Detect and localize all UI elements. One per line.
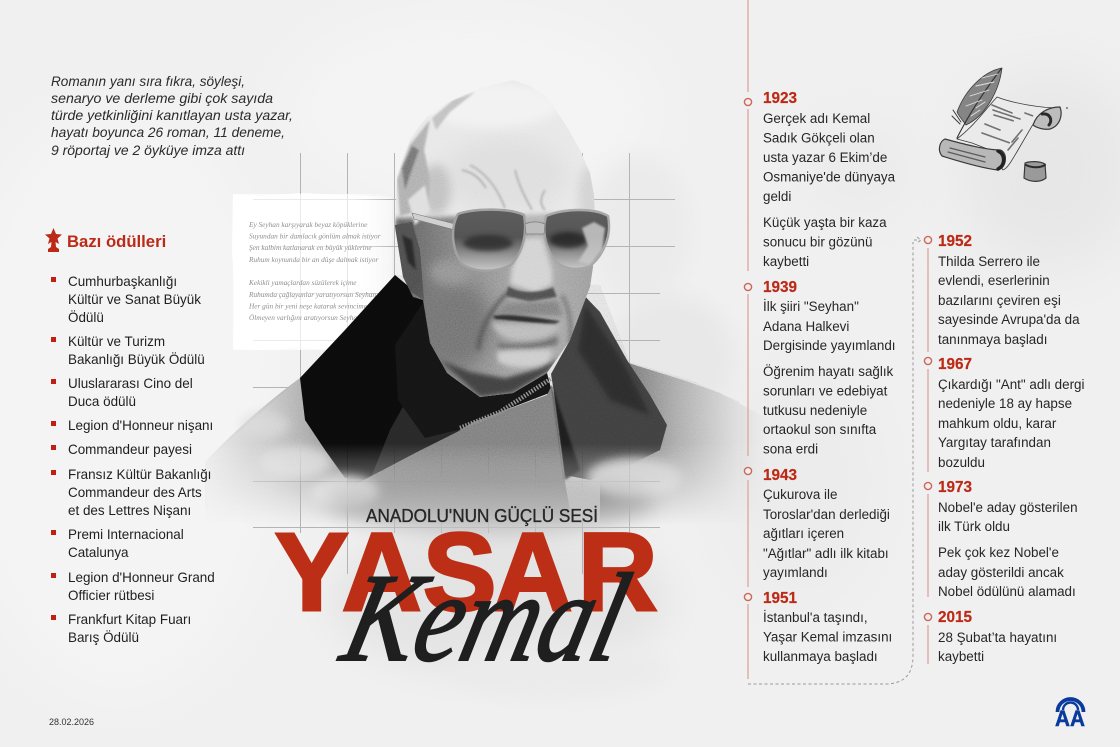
nose: [510, 238, 552, 292]
light upper head: [396, 80, 585, 225]
turtleneck: [395, 300, 552, 438]
entry 1967: Çıkardığı "Ant" adlı dergi: [938, 377, 1084, 392]
entry 2015: 2015: [938, 609, 973, 626]
entry 1943: Toroslar'dan derlediği: [763, 507, 890, 522]
entry 1943: ağıtları içeren: [763, 526, 844, 541]
entry 1943: Çukurova ile: [763, 487, 837, 502]
head: [390, 78, 605, 403]
heading: awards: [45, 228, 166, 252]
entry 1939: Dergisinde yayımlandı: [763, 338, 895, 353]
entry 1951: 1951: [763, 590, 798, 607]
subtitle: ANADOLU'NUN GÜÇLÜ SESİ: [366, 506, 598, 526]
wash behind the lower body: [325, 466, 655, 534]
lower face tone: [395, 212, 600, 400]
entry 1923: geldi: [763, 189, 791, 204]
entry 1952: tanınmaya başladı: [938, 332, 1047, 347]
left cheek: [422, 283, 494, 367]
entry 1923: 1923: [763, 90, 797, 107]
awards list: Fransız Kültür Bakanlığı: [68, 467, 211, 482]
entry 1923: Sadık Gökçeli olan: [763, 130, 875, 146]
entry 2015: kaybetti: [938, 649, 984, 664]
entry 1967: nedeniyle 18 ay hapse: [938, 396, 1072, 411]
right lens: [544, 210, 609, 269]
entry 1952: Thilda Serrero ile: [938, 254, 1040, 269]
name: Kemal: Kemal: [329, 548, 642, 688]
timeline: left column: [744, 0, 896, 679]
entry 1923: Osmaniye'de dünyaya: [763, 170, 896, 184]
entry 1923: Küçük yaşta bir kaza: [763, 215, 887, 230]
awards list: Kültür ve Turizm: [68, 334, 165, 349]
entry 1967: Yargıtay tarafından: [938, 435, 1051, 450]
intro paragraph: 9 röportaj ve 2 öyküye imza attı: [51, 142, 245, 158]
entry 1952: [924, 233, 1080, 347]
timeline connector: [748, 237, 921, 684]
awards list: Bakanlığı Büyük Ödülü: [68, 352, 205, 367]
upper lip and mouth: [496, 300, 563, 316]
poem text: Ruhum koynunda bir an düşe dalmak istiyor: [248, 255, 378, 264]
entry 1943: [744, 467, 890, 580]
entry 1973: Pek çok kez Nobel'e: [938, 545, 1059, 560]
entry 1939: Adana Halkevi: [763, 319, 849, 334]
entry 1951: İstanbul'a taşındı,: [763, 610, 868, 625]
nasolabial shadow: [478, 292, 508, 350]
intro paragraph: hayatı boyunca 26 roman, 11 deneme,: [51, 124, 285, 140]
dark left collar: [300, 275, 430, 480]
awards list: Cumhurbaşkanlığı: [68, 274, 177, 289]
poem text: Şen kalbim katlanarak en büyük yüklerine: [249, 243, 372, 252]
entry 1923: kaybetti: [763, 254, 809, 269]
entry 1939: tutkusu nedeniyle: [763, 403, 867, 418]
entry 1952: 1952: [938, 233, 972, 250]
timeline: right column: [924, 233, 1084, 664]
entry 1923: sonucu bir gözünü: [763, 234, 872, 250]
bridge: [525, 222, 545, 234]
icon: quill, scroll and inkwell: [939, 68, 1068, 181]
entry 1967: [924, 356, 1084, 470]
awards list: Premi Internacional: [68, 527, 184, 542]
portrait of Yaşar Kemal: [200, 78, 770, 540]
face grain: [395, 95, 594, 397]
entry 1943: yayımlandı: [763, 565, 828, 580]
entry 2015: 28 Şubat’ta hayatını: [938, 630, 1057, 645]
jaw shadow: [440, 358, 560, 397]
glasses: [412, 210, 609, 271]
quill feather: [957, 68, 1002, 125]
awards list: [51, 274, 215, 645]
scroll text lines: [982, 105, 1033, 150]
chin: [497, 350, 552, 367]
title block: [274, 506, 658, 662]
grid lines: [253, 153, 675, 574]
temple arm: [412, 213, 455, 230]
left lens: [453, 210, 525, 271]
coat and sweater: [205, 275, 752, 520]
awards list: Uluslararası Cino del: [68, 376, 193, 391]
icon: trophy star: [45, 228, 62, 252]
entry 1939: İlk şiiri "Seyhan": [763, 299, 859, 314]
hair: [434, 87, 553, 124]
top roll: [1033, 107, 1061, 129]
awards list: Catalunya: [68, 545, 129, 560]
heading: awards: Bazı ödülleri: [67, 232, 166, 251]
right collar: [551, 288, 667, 480]
entry 1939: [744, 279, 895, 456]
intro paragraph: Romanın yanı sıra fıkra, söyleşi,: [51, 73, 245, 89]
entry 1939: sona erdi: [763, 442, 818, 456]
entry 1952: sayesinde Avrupa'da da: [938, 312, 1080, 327]
awards list: Legion d'Honneur nişanı: [68, 418, 213, 433]
scroll paper: [957, 97, 1059, 170]
sweater zipper: [460, 378, 552, 428]
entry 2015: [924, 609, 1057, 664]
ear: [395, 222, 424, 300]
awards list: Kültür ve Sanat Büyük: [68, 292, 201, 307]
awards list: Frankfurt Kitap Fuarı: [68, 612, 191, 627]
entry 1973: ilk Türk oldu: [938, 519, 1010, 534]
entry 1943: 1943: [763, 467, 797, 484]
entry 1951: Yaşar Kemal imzasını: [763, 630, 892, 644]
torn paper with poem: [232, 153, 675, 574]
entry 1973: [924, 479, 1078, 599]
poem text: Ey Seyhan karşıyarak beyaz köpüklerine: [248, 220, 368, 229]
logo: Anadolu Agency: AA: [1055, 706, 1085, 731]
entry 1951: [744, 590, 892, 664]
entry 1973: Nobel'e aday gösterilen: [938, 500, 1078, 515]
poem text: Her gün bir yeni neşe katarak sevincime: [248, 302, 368, 310]
entry 1923: usta yazar 6 Ekim’de: [763, 150, 887, 165]
entry 1973: 1973: [938, 479, 972, 496]
awards list: Duca ödülü: [68, 394, 136, 409]
entry 1939: 1939: [763, 279, 797, 296]
intro paragraph: senaryo ve derleme gibi çok sayıda: [51, 90, 273, 106]
entry 1923: [744, 90, 896, 269]
entry 1939: ortaokul son sınıfta: [763, 422, 877, 437]
entry 1967: mahkum oldu, karar: [938, 416, 1057, 431]
entry 1973: aday gösterildi ancak: [938, 565, 1064, 580]
awards list: Barış Ödülü: [68, 630, 139, 645]
entry 1973: Nobel ödülünü alamadı: [938, 584, 1076, 599]
bottom roll: [939, 139, 1005, 170]
poem text: Ölmeyen varlığını aratıyorsun Seyhan: [249, 313, 361, 322]
date: 28.02.2026: [49, 717, 94, 727]
coat grain: [205, 275, 740, 503]
lower lip: [492, 322, 560, 340]
entry 1967: 1967: [938, 356, 972, 373]
poem text: Suyundan bir damlacık gönlüm almak istiyor: [249, 232, 381, 240]
intro paragraph: [51, 73, 293, 158]
awards list: Legion d'Honneur Grand: [68, 570, 215, 585]
intro paragraph: türde yetkinliğini kanıtlayan usta yazar,: [51, 107, 293, 123]
poem text: [248, 220, 381, 322]
inkwell: [1024, 162, 1046, 181]
awards list: et des Lettres Nişanı: [68, 503, 191, 518]
entry 1943: "Ağıtlar" adlı ilk kitabı: [763, 546, 889, 561]
entry 1951: kullanmaya başladı: [763, 649, 878, 664]
awards list: Commandeur payesi: [68, 442, 192, 457]
grey sweater: [360, 385, 570, 516]
entry 1952: evlendi, eserlerinin: [938, 273, 1050, 288]
poem text: Kekikli yamaçlardan süzülerek içime: [248, 278, 357, 287]
entry 1952: bazılarını çeviren eşi: [938, 293, 1061, 308]
awards list: Commandeur des Arts: [68, 485, 202, 500]
soft fade over collar hem: [587, 458, 683, 498]
forehead wrinkles: [462, 165, 545, 210]
name: Yaşar: YAŞAR: [275, 511, 657, 634]
awards list: Ödülü: [68, 310, 104, 325]
forehead shading: [455, 147, 554, 220]
entry 1939: Öğrenim hayatı sağlık: [763, 364, 894, 379]
right shoulder: [600, 363, 752, 520]
dark coat: [348, 372, 466, 482]
entry 1939: sorunları ve edebiyat: [763, 384, 888, 398]
entry 1923: Gerçek adı Kemal: [763, 111, 870, 126]
entry 1967: bozuldu: [938, 455, 985, 470]
left shoulder: [208, 378, 347, 515]
poem text: Ruhumda çağlayanlar yaratıyorsun Seyhan: [248, 290, 376, 299]
awards list: Officier rütbesi: [68, 588, 154, 603]
